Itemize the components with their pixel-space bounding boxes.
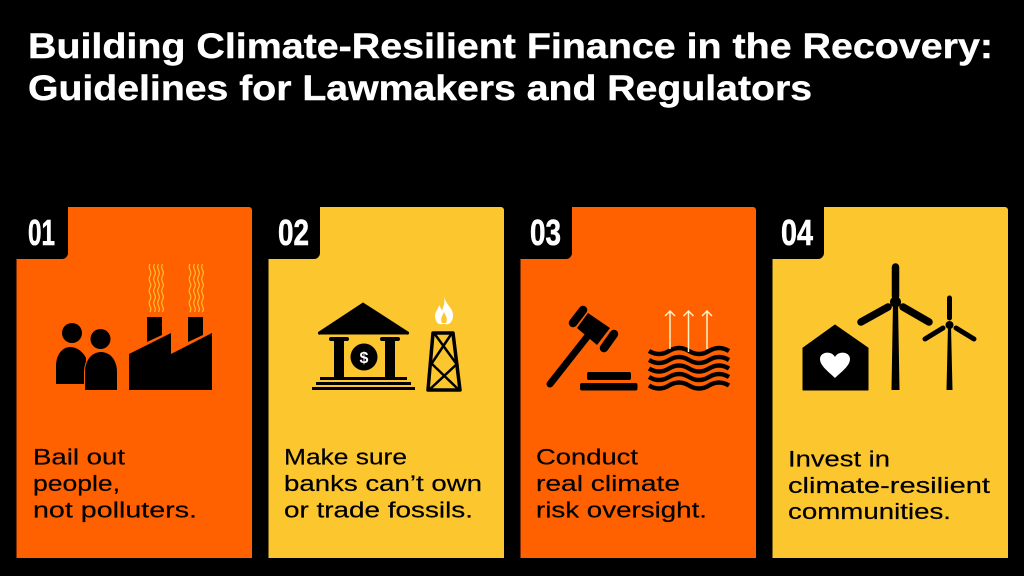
number 03: 03 xyxy=(530,212,561,253)
text: card 03: Conduct xyxy=(536,444,638,470)
panel: card 01 xyxy=(16,207,252,558)
text: card 01 xyxy=(33,444,197,522)
icon: wind turbines xyxy=(861,267,974,390)
panel: card 04 xyxy=(772,207,1008,558)
text: card 03: real climate xyxy=(536,471,680,496)
panel: card 03 xyxy=(520,207,756,558)
icon: house with heart xyxy=(803,325,868,390)
title xyxy=(28,27,993,108)
icon: gavel xyxy=(550,310,638,390)
icon: oil rig with flame xyxy=(428,296,460,390)
number 01: 01 xyxy=(28,212,55,253)
icon: rising water with arrows xyxy=(649,311,729,388)
title: Guidelines for Lawmakers and Regulators xyxy=(28,69,812,108)
text: card 04 xyxy=(788,446,990,524)
text: card 01: not polluters. xyxy=(33,498,197,522)
number 04: 04 xyxy=(781,212,813,253)
text: card 01: people, xyxy=(33,471,120,496)
icon: bank: $ xyxy=(360,350,369,367)
text: card 02: banks can’t own xyxy=(284,471,482,496)
text: card 03 xyxy=(536,444,707,522)
panel: card 02 xyxy=(268,207,504,558)
text: card 04: climate-resilient xyxy=(788,473,990,498)
text: card 02: or trade fossils. xyxy=(284,498,473,522)
title: Building Climate-Resilient Finance in the Recovery: xyxy=(28,27,993,66)
text: card 01: Bail out xyxy=(33,444,125,470)
text: card 02 xyxy=(284,444,482,522)
icon: factory with smoke xyxy=(129,264,212,390)
icon: bank xyxy=(312,303,415,390)
text: card 03: risk oversight. xyxy=(536,498,707,522)
text: card 04: communities. xyxy=(788,499,951,524)
text: card 04: Invest in xyxy=(788,446,890,472)
number 02: 02 xyxy=(278,212,309,253)
text: card 02: Make sure xyxy=(284,444,407,470)
icon: people xyxy=(56,323,117,390)
